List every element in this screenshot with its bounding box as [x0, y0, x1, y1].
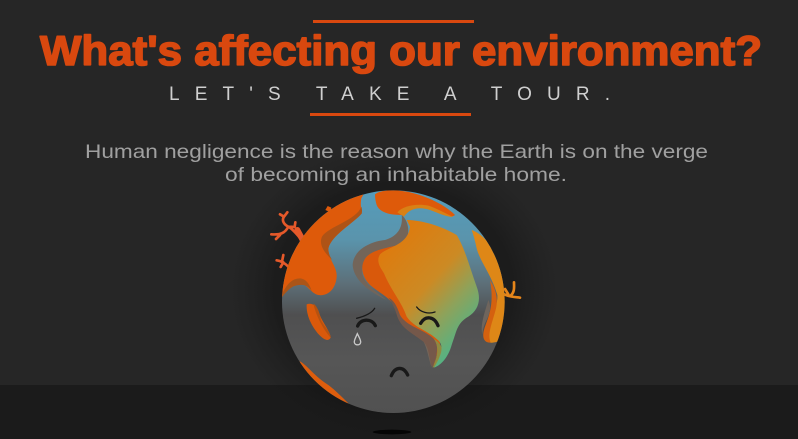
top rule: [313, 20, 474, 23]
dead tree left: [271, 212, 305, 267]
stump top left: [325, 206, 331, 212]
dead tree right: [500, 282, 520, 298]
continent: top left orange: [282, 194, 364, 296]
continent: top: [375, 190, 455, 216]
illustration: sad earth: [260, 185, 520, 434]
island left: [307, 304, 331, 340]
brown coast lower: [388, 298, 437, 368]
face: left eye: [357, 308, 375, 326]
bottom rule: [310, 113, 471, 116]
globe shadow on floor: [373, 430, 411, 434]
subtitle: LET'S TAKE A TOUR.: [169, 84, 610, 105]
shaded bay left: [282, 278, 312, 297]
orange main continent: [362, 246, 440, 366]
face: tear: [354, 334, 361, 345]
grey brown coast upper: [353, 215, 434, 368]
face: right eye: [417, 307, 438, 326]
continent: right rim: [472, 230, 505, 343]
intro text: [85, 141, 708, 186]
top gold highlight: [397, 205, 453, 217]
globe body: [282, 190, 505, 413]
island left shade: [313, 304, 331, 338]
title: What's affecting our environment?: [40, 27, 762, 74]
face: mouth: [391, 368, 408, 376]
shaded band left continent: [321, 207, 362, 260]
floor band: [0, 385, 798, 439]
intro text: of becoming an inhabitable home.: [225, 164, 567, 186]
continent: bottom left: [300, 362, 349, 404]
intro text: Human negligence is the reason why the Earth is on the verge: [85, 141, 708, 163]
green shade: [433, 339, 443, 368]
shadow halo around globe: [229, 143, 559, 439]
right coast grey: [482, 300, 490, 334]
gradient land: [378, 220, 479, 368]
right rim shade: [483, 280, 497, 342]
